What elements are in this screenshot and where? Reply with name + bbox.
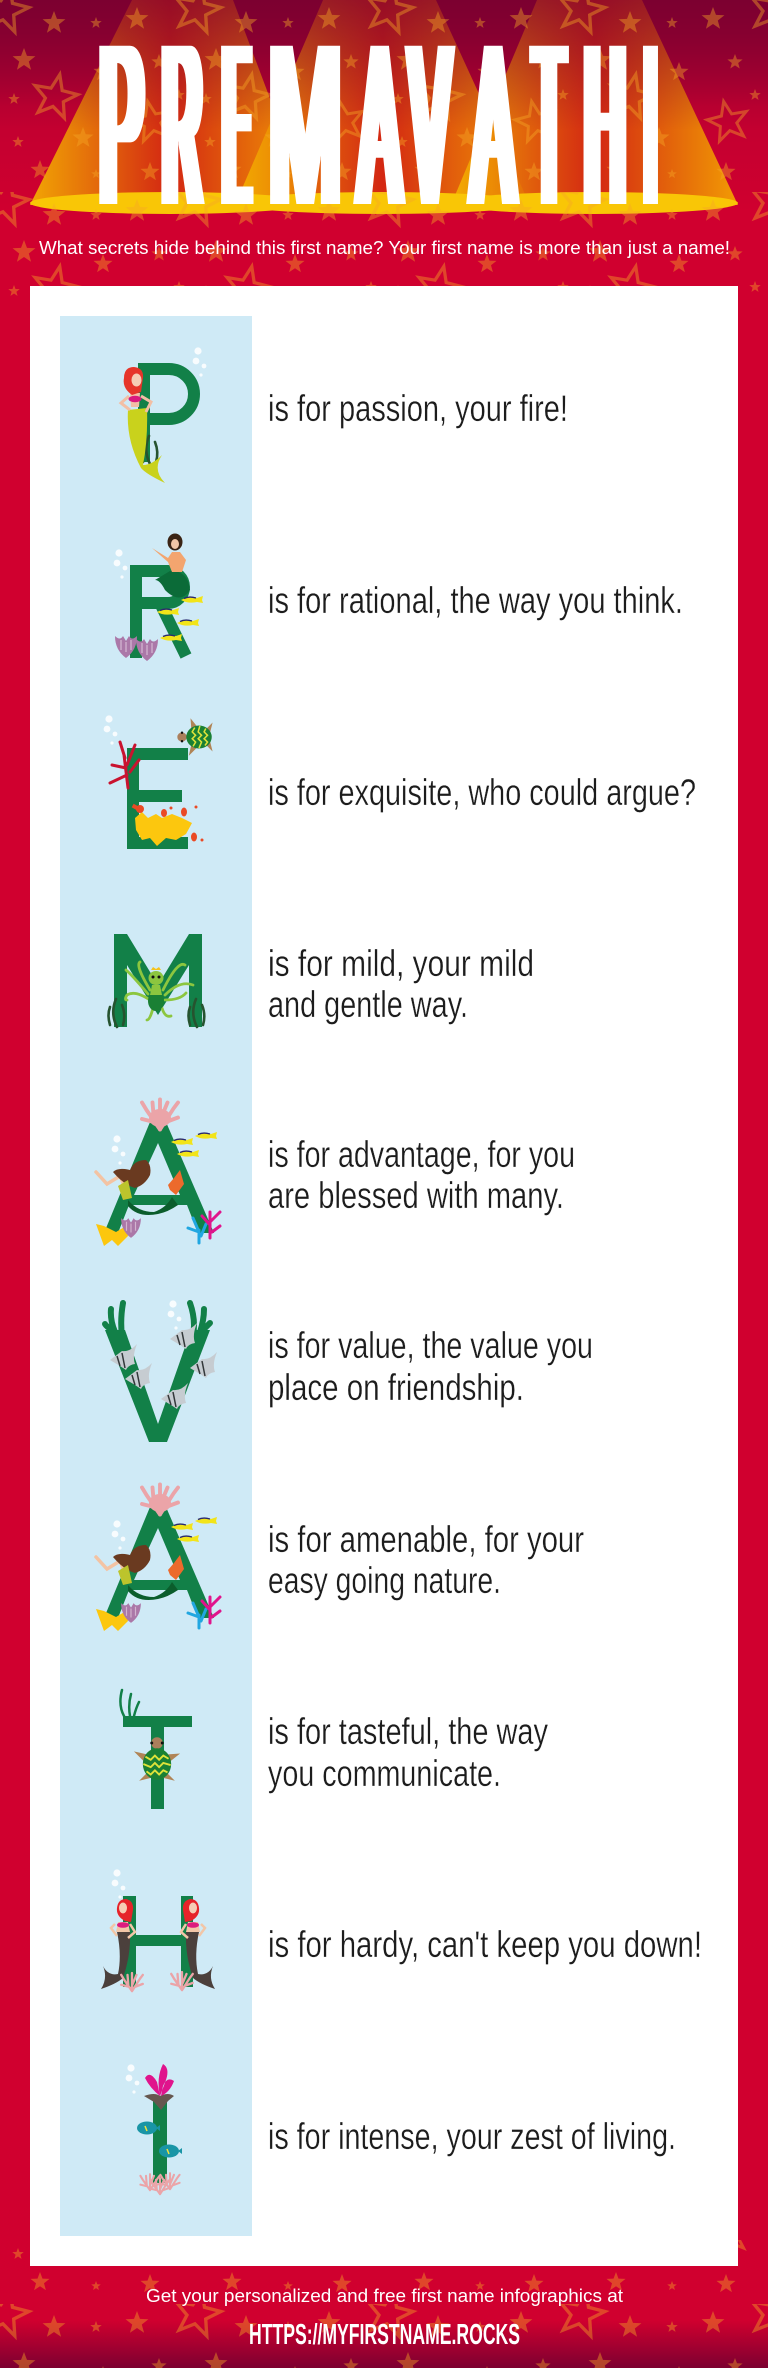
letter V illustration bbox=[105, 1300, 217, 1442]
text: A: is for advantage, for you bbox=[268, 1134, 575, 1175]
letter R illustration bbox=[114, 534, 203, 661]
row A bbox=[96, 1100, 575, 1246]
text: M bbox=[268, 943, 534, 1025]
row R bbox=[114, 534, 683, 661]
star pattern bottom bbox=[0, 2240, 768, 2368]
title: R bbox=[163, 0, 201, 253]
letter H illustration bbox=[101, 1869, 215, 1991]
bubbles bbox=[112, 1135, 125, 1165]
letter I illustration bbox=[126, 2064, 182, 2194]
row E bbox=[104, 715, 696, 849]
bubbles second bbox=[112, 1520, 125, 1550]
title: P bbox=[100, 0, 143, 253]
text: V bbox=[268, 1325, 593, 1408]
title: M bbox=[269, 0, 341, 253]
text: A second bbox=[268, 1519, 584, 1601]
spotlights bbox=[0, 0, 768, 214]
footer text: Get your personalized and free first name infographics at bbox=[146, 2285, 623, 2306]
text: M: and gentle way. bbox=[268, 984, 468, 1025]
row P bbox=[121, 347, 568, 483]
text: T bbox=[268, 1711, 548, 1794]
panel: letters bbox=[30, 286, 738, 2266]
text: M: is for mild, your mild bbox=[268, 943, 534, 984]
text: V: place on friendship. bbox=[268, 1367, 524, 1408]
letter A illustration 2 bbox=[96, 1484, 220, 1631]
blue letter column bbox=[60, 316, 252, 2236]
row M bbox=[108, 934, 534, 1027]
footer link: HTTPS://MYFIRSTNAME.ROCKS bbox=[249, 2319, 520, 2351]
title: T bbox=[534, 0, 564, 253]
title: A bbox=[359, 0, 400, 253]
text: P: is for passion, your fire! bbox=[268, 388, 568, 429]
title bbox=[99, 0, 658, 253]
title: H bbox=[585, 0, 625, 253]
letter T illustration bbox=[120, 1690, 192, 1809]
title: I bbox=[646, 0, 655, 253]
title: E bbox=[224, 0, 249, 253]
letter M illustration bbox=[108, 934, 204, 1027]
letter P illustration bbox=[121, 347, 206, 483]
text: A second: is for amenable, for your bbox=[268, 1519, 584, 1560]
title: V bbox=[410, 0, 450, 253]
subtitle: What secrets hide behind this first name? Your first name is more than just a name! bbox=[39, 237, 730, 258]
text: A: are blessed with many. bbox=[268, 1175, 564, 1216]
row T bbox=[120, 1690, 548, 1809]
text: T: you communicate. bbox=[268, 1753, 501, 1794]
star pattern top bbox=[0, 0, 768, 300]
letter A illustration 1 bbox=[96, 1100, 220, 1246]
title: A bbox=[472, 0, 514, 253]
text: A second: easy going nature. bbox=[268, 1560, 501, 1601]
row A second bbox=[96, 1484, 584, 1631]
row H bbox=[101, 1869, 702, 1991]
row I bbox=[126, 2064, 676, 2194]
letter E illustration bbox=[104, 715, 213, 849]
text: A bbox=[268, 1134, 575, 1216]
text: V: is for value, the value you bbox=[268, 1325, 593, 1366]
row V bbox=[105, 1300, 593, 1442]
text: T: is for tasteful, the way bbox=[268, 1711, 548, 1752]
